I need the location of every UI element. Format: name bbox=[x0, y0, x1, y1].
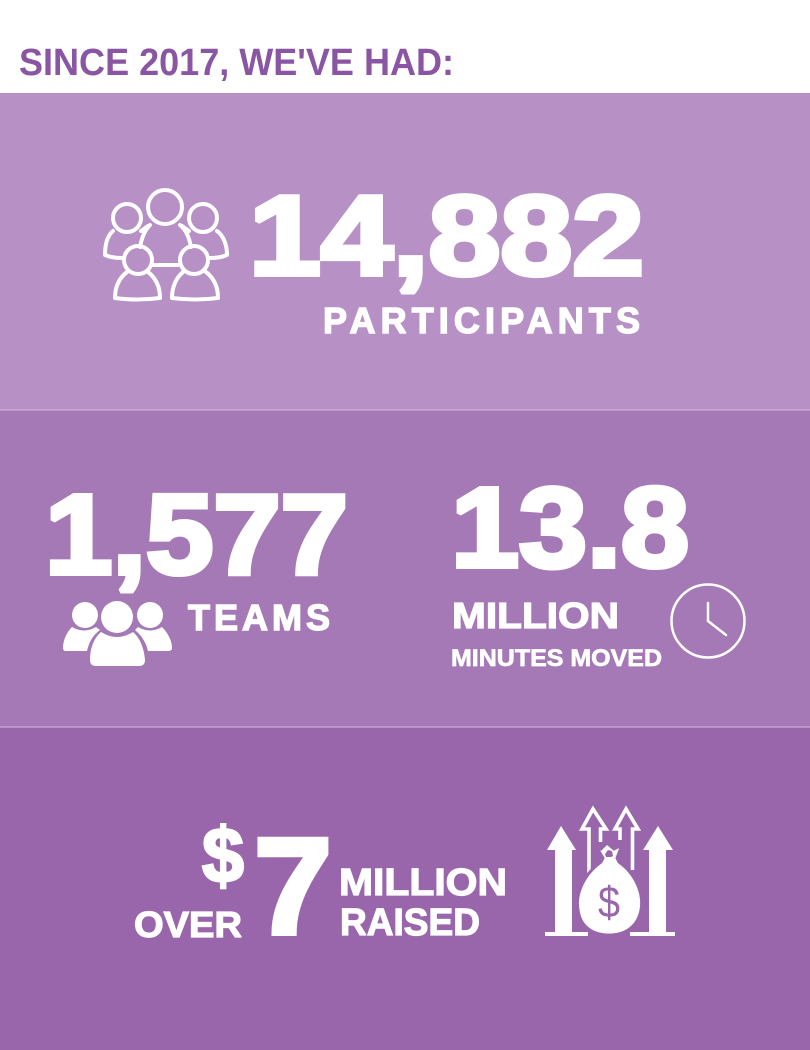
panel: money raised bbox=[0, 726, 810, 1050]
icon: team of three people bbox=[63, 601, 172, 666]
icon: group of five people bbox=[105, 190, 227, 300]
panel: participants bbox=[0, 93, 810, 410]
label: participants: PARTICIPANTS bbox=[323, 300, 640, 341]
statistic: 1,577: 1,577 bbox=[45, 472, 348, 598]
label: teams: TEAMS bbox=[188, 597, 330, 638]
text: dollar in bag: $ bbox=[598, 878, 620, 927]
statistic: 13.8: 13.8 bbox=[451, 464, 689, 590]
icon: clock bbox=[672, 584, 744, 658]
label: million: MILLION bbox=[452, 595, 619, 636]
label: minutes moved: MINUTES MOVED bbox=[451, 645, 662, 672]
icon: money bag with rising arrows bbox=[545, 809, 675, 936]
title: SINCE 2017, WE'VE HAD: bbox=[19, 42, 454, 84]
text: dollar sign: $ bbox=[202, 811, 244, 899]
statistic: 14,882: 14,882 bbox=[249, 172, 644, 298]
statistic: 7: 7 bbox=[254, 810, 332, 964]
text: over: OVER bbox=[134, 904, 242, 945]
text: million: MILLION bbox=[339, 862, 507, 904]
text: raised: RAISED bbox=[340, 902, 480, 944]
panel: teams and minutes bbox=[0, 410, 810, 727]
